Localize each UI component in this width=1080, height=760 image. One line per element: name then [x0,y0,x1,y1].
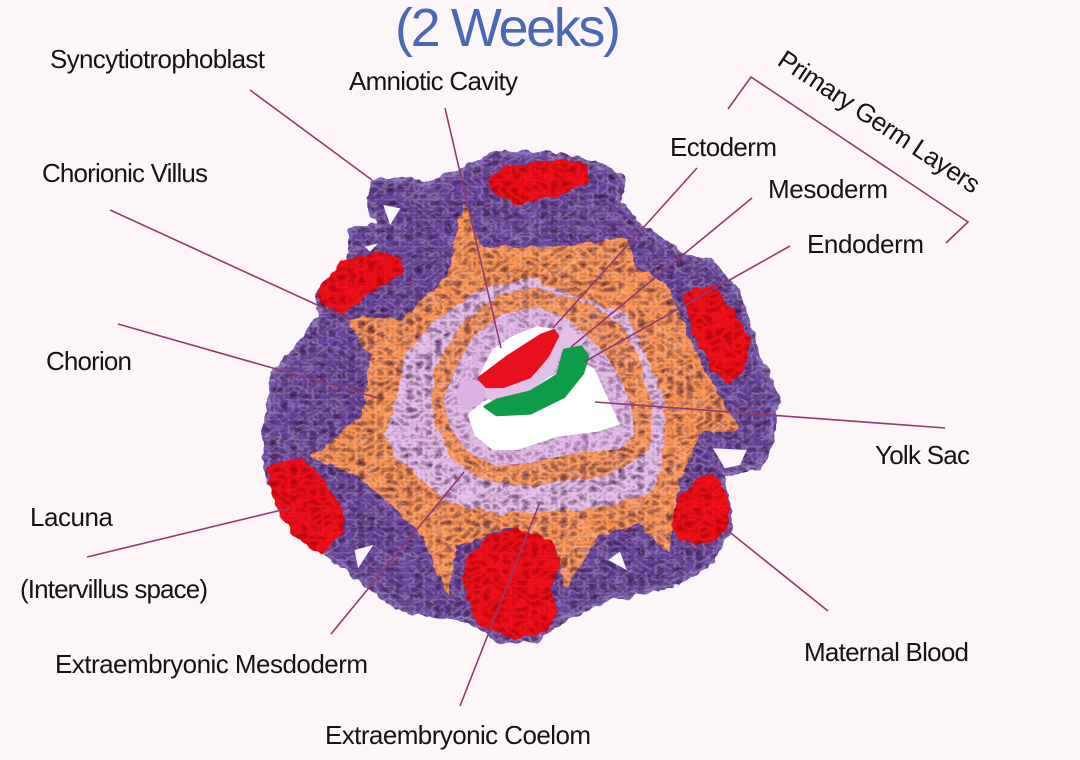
line: extraembryonic mesoderm [331,472,464,634]
label: Extraembryonic Mesdoderm: Extraembryonic Mesdoderm [55,649,368,679]
line: yolk sac [595,402,945,428]
line: maternal blood [727,530,828,611]
line: amniotic cavity [445,108,501,348]
label: Maternal Blood: Maternal Blood [804,637,969,667]
leader lines [87,77,968,706]
panel: extraembryonic mesoderm lilac ring [385,278,666,513]
label: Yolk Sac: Yolk Sac [875,440,970,470]
line: lacuna [87,508,290,557]
label: Syncytiotrophoblast: Syncytiotrophoblast [50,44,266,74]
label: Chorionic Villus: Chorionic Villus [42,158,208,188]
line: mesoderm [571,198,752,347]
line: ectoderm [553,168,697,328]
amniotic cavity [481,327,557,388]
line: chorion [118,324,378,398]
lilac bridge [480,325,586,403]
label: Ectoderm: Ectoderm [670,132,777,162]
yolk sac cavity [470,365,618,448]
panel: chorion orange star [311,203,740,597]
line: syncytiotrophoblast [250,90,372,180]
label: Lacuna: Lacuna [30,502,114,532]
line: extraembryonic coelom [460,502,540,706]
connecting stalk knot [457,379,485,407]
label: Mesoderm: Mesoderm [768,174,888,204]
line: endoderm [584,246,790,362]
label: Amniotic Cavity: Amniotic Cavity [349,66,518,96]
label: Intervillus space: (Intervillus space) [20,574,208,604]
ectoderm and mesoderm red band [478,330,561,387]
label: Chorion: Chorion [46,346,132,376]
panel: inner orange ring [432,287,652,487]
lacunar holes [355,205,747,570]
bracket: primary germ layers [728,77,968,243]
crochet embryo model [265,153,777,640]
label: Endoderm: Endoderm [807,229,924,259]
panel: inner lilac ring [446,310,632,463]
label: Extraembryonic Coelom: Extraembryonic Coelom [325,720,591,750]
label: Primary Germ Layers: Primary Germ Layers [773,44,986,199]
panel: maternal blood red patches [267,158,750,640]
endoderm green band [485,347,588,415]
line: chorionic villus [110,210,350,320]
panel: syncytiotrophoblast outer layer [265,153,777,640]
